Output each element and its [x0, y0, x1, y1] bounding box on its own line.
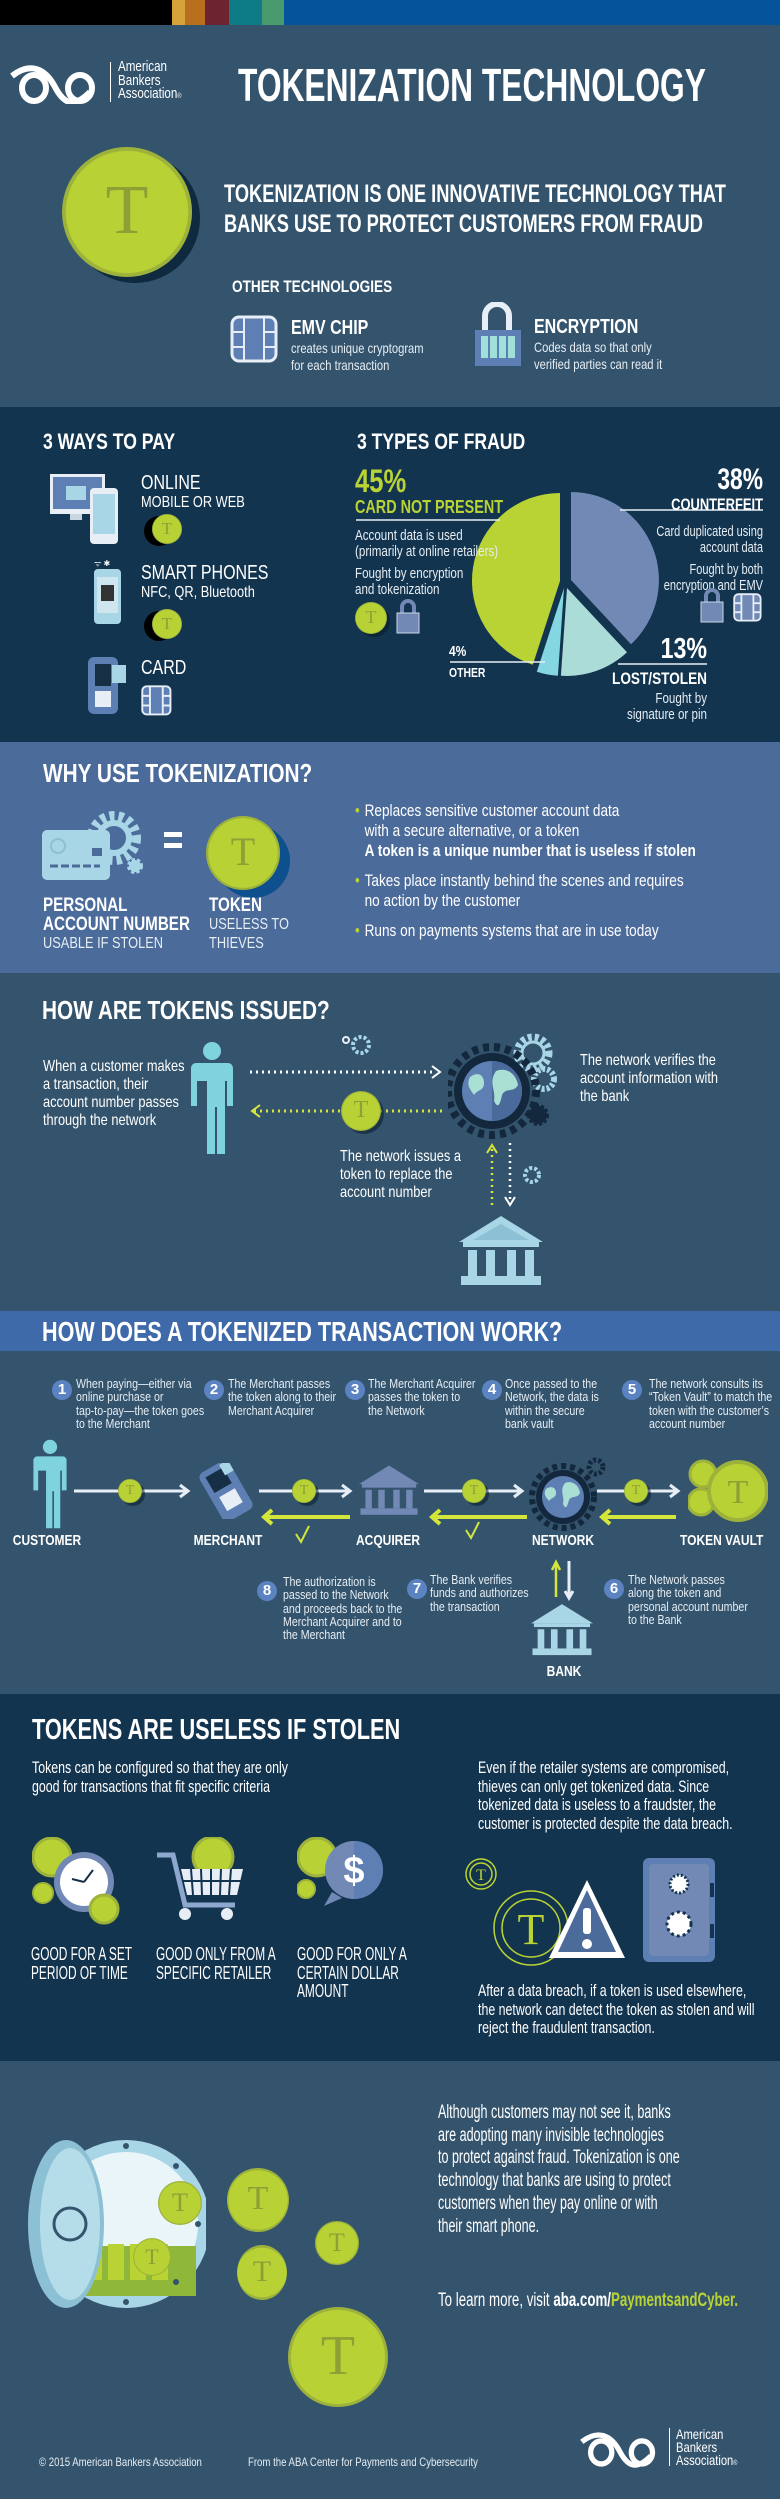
closing text	[438, 2102, 680, 2238]
panel: transaction flow: T	[300, 1483, 308, 1498]
callout: counterfeit: encryption and EMV	[664, 578, 763, 594]
panel: transaction flow	[0, 1351, 780, 1694]
step 1: to the Merchant	[76, 1416, 150, 1431]
pie chart	[356, 492, 763, 676]
online text: ONLINE	[141, 472, 201, 494]
step 5: “Token Vault” to match the	[649, 1389, 772, 1404]
icon: token vault coins	[688, 1460, 768, 1522]
label: dollar: AMOUNT	[297, 1981, 348, 2001]
smart phones text: SMART PHONES	[141, 562, 268, 584]
closing text: customers when they pay online or with	[438, 2193, 658, 2214]
arrow: account number to network	[250, 1035, 442, 1079]
text: customer: through the network	[43, 1112, 156, 1129]
label: time: GOOD FOR A SET	[31, 1944, 132, 1964]
other technologies heading: OTHER TECHNOLOGIES	[232, 277, 392, 296]
icon: dollar bubble: $	[343, 1850, 365, 1892]
EMV chip	[230, 316, 424, 373]
step 8: passed to the Network	[283, 1587, 389, 1602]
icon: network globe with gears	[448, 1034, 557, 1139]
step 1	[52, 1376, 204, 1431]
callout: counterfeit: 38%	[717, 463, 763, 496]
callout: card not present: CARD NOT PRESENT	[355, 497, 503, 517]
callout: card not present: 45%	[355, 463, 406, 499]
step 3: 3	[351, 1381, 359, 1398]
callout: other: 4%	[449, 643, 466, 660]
panel: closing: T	[253, 2255, 271, 2288]
footer copyright: © 2015 American Bankers Association	[39, 2455, 202, 2469]
icon: lock	[475, 302, 521, 366]
EMV chip: EMV CHIP	[291, 317, 368, 339]
bullet list: A token is a unique number that is useless if stolen	[365, 841, 696, 860]
callout: card not present: Account data is used	[355, 528, 463, 544]
arrow: token back to customer	[250, 1104, 442, 1118]
text: network verifies	[580, 1052, 718, 1105]
heading: HOW ARE TOKENS ISSUED?	[42, 995, 330, 1025]
coin: issued token: T	[354, 1097, 368, 1123]
encryption: Codes data so that only	[534, 339, 652, 355]
icon: acquirer bank	[359, 1466, 419, 1515]
panel: ways to pay and fraud types: MOBILE OR WEB	[141, 494, 245, 511]
callout: lost/stolen: 13%	[661, 633, 707, 665]
step 2: 2	[210, 1381, 218, 1398]
icon: bank	[531, 1602, 593, 1658]
icon: smartphone: ᯤ ✱	[94, 559, 111, 568]
text: retailer compromised: customer is protected despite the data breach.	[478, 1815, 733, 1833]
panel: transaction flow: T	[632, 1483, 640, 1498]
step 5	[622, 1376, 772, 1431]
text: network issues token	[340, 1148, 461, 1201]
coins floating: T	[172, 2188, 188, 2217]
text: configuration: good for transactions that fit specific criteria	[32, 1778, 270, 1796]
callout: lost/stolen: Fought by	[655, 691, 707, 707]
bullet list: Runs on payments systems that are in use today	[365, 921, 659, 940]
icon: smartphone	[94, 559, 121, 624]
card text: CARD	[141, 657, 186, 679]
label: dollar: GOOD FOR ONLY A	[297, 1944, 407, 1964]
text: retailer compromised: tokenized data is useless to a fraudster, the	[478, 1796, 716, 1814]
title: TOKENIZATION TECHNOLOGY	[238, 59, 706, 111]
panel: transaction flow: T	[470, 1483, 478, 1498]
coin online	[152, 514, 182, 544]
callout: other	[449, 643, 486, 680]
icon: breach illustration: T	[476, 1867, 486, 1884]
label: token	[209, 895, 289, 952]
icon: breach illustration	[465, 1858, 725, 1966]
bullet list: •	[355, 801, 360, 820]
callout: lost/stolen: signature or pin	[627, 707, 707, 723]
headline	[224, 180, 726, 238]
step 6: 6	[610, 1580, 618, 1597]
step 3	[345, 1376, 476, 1418]
footer source: From the ABA Center for Payments and Cybersecurity	[248, 2455, 478, 2469]
logo: Association®	[118, 86, 181, 102]
encryption: verified parties can read it	[534, 356, 662, 372]
logo: Bankers	[118, 72, 161, 88]
headline: BANKS USE TO PROTECT CUSTOMERS FROM FRAUD	[224, 210, 703, 238]
icon: chip	[230, 316, 278, 362]
text: customer: account number passes	[43, 1094, 179, 1111]
header band: how does a tokenized transaction work	[0, 1311, 780, 1351]
step 6: The Network passes	[628, 1572, 725, 1587]
header panel	[0, 25, 780, 407]
heading: TOKENS ARE USELESS IF STOLEN	[32, 1714, 400, 1746]
closing text: are adopting many invisible technologies	[438, 2125, 664, 2146]
icon: token vault coins: T	[728, 1474, 749, 1511]
text: network issues token: account number	[340, 1184, 432, 1201]
text: network verifies: the bank	[580, 1088, 629, 1105]
closing text: Although customers may not see it, banks	[438, 2102, 671, 2123]
step 3: The Merchant Acquirer	[368, 1376, 475, 1391]
callout: other: OTHER	[449, 665, 485, 680]
step 7: funds and authorizes	[430, 1585, 529, 1600]
icon: bank	[459, 1216, 543, 1285]
coin: issued token	[341, 1091, 381, 1131]
panel: transaction flow: ACQUIRER	[356, 1532, 420, 1549]
learn more link text: To learn more, visit aba.com/PaymentsandCyber.	[438, 2290, 738, 2311]
encryption	[475, 302, 662, 372]
text: after breach: After a data breach, if a token is used elsewhere,	[478, 1982, 746, 2000]
text: retailer compromised	[478, 1759, 733, 1833]
icons: lock and chip	[700, 588, 762, 622]
bullet list: with a secure alternative, or a token	[365, 821, 579, 840]
text: after breach: the network can detect the token as stolen and will	[478, 2001, 755, 2019]
step 8: and proceeds back to the	[283, 1601, 402, 1616]
label: personal account number: PERSONAL	[43, 895, 127, 916]
footer logo: American	[676, 2426, 723, 2442]
coins on arrows	[118, 1479, 142, 1503]
panel: ways to pay and fraud types	[0, 407, 780, 742]
step 2: Merchant Acquirer	[228, 1403, 314, 1418]
step 6: along the token and	[628, 1585, 721, 1600]
icon: customer	[33, 1440, 67, 1528]
text: retailer compromised: thieves can only get tokenized data. Since	[478, 1778, 709, 1796]
step 8: the Merchant	[283, 1627, 345, 1642]
icons: token and lock: T	[366, 607, 376, 627]
icon: chip small	[141, 685, 172, 716]
icon: dollar bubble	[297, 1837, 387, 1909]
step 4	[482, 1376, 599, 1431]
callout: counterfeit: Fought by both	[689, 562, 763, 578]
step 3: passes the token to	[368, 1389, 460, 1404]
token coin	[206, 816, 280, 890]
label: retailer: SPECIFIC RETAILER	[156, 1963, 271, 1983]
callout: card not present: (primarily at online retailers)	[355, 544, 498, 560]
coin online: T	[162, 519, 172, 538]
EMV chip: creates unique cryptogram	[291, 340, 424, 356]
step 2: The Merchant passes	[228, 1376, 330, 1391]
logo	[10, 59, 182, 104]
step 4: Once passed to the	[505, 1376, 597, 1391]
label: token: TOKEN	[209, 895, 262, 916]
panel: closing: T	[248, 2180, 268, 2217]
panel: how are tokens issued	[0, 973, 780, 1311]
step 8	[257, 1579, 397, 1645]
closing text: to protect against fraud. Tokenization is one	[438, 2147, 680, 2168]
callout: card not present: and tokenization	[355, 582, 439, 598]
step 2	[204, 1376, 336, 1418]
text: network issues token: The network issues a	[340, 1148, 461, 1165]
step 4: 4	[488, 1381, 496, 1398]
heading: 3 types of fraud: 3 TYPES OF FRAUD	[357, 429, 525, 454]
bullet list: •	[355, 921, 360, 940]
panel: transaction flow: NETWORK	[532, 1532, 594, 1549]
step 7: 7	[413, 1580, 421, 1597]
bullet list: Replaces sensitive customer account data	[365, 801, 619, 820]
arrows: flow	[0, 1351, 780, 1611]
panel: closing	[0, 2061, 780, 2499]
panel: closing: T	[145, 2244, 159, 2269]
text: customer: When a customer makes	[43, 1058, 185, 1075]
label: retailer: GOOD ONLY FROM A	[156, 1944, 276, 1964]
EMV chip: for each transaction	[291, 357, 389, 373]
label: dollar: CERTAIN DOLLAR	[297, 1963, 399, 1983]
bullet list: Takes place instantly behind the scenes and requires	[365, 871, 684, 890]
text: network verifies: account information with	[580, 1070, 718, 1087]
text: configuration	[32, 1759, 288, 1797]
step 5: The network consults its	[649, 1376, 763, 1391]
label: personal account number	[43, 895, 190, 952]
panel: closing: T	[321, 2325, 355, 2387]
step 5: token with the customer’s	[649, 1403, 769, 1418]
label: time: PERIOD OF TIME	[31, 1963, 128, 1983]
text: network issues token: token to replace the	[340, 1166, 452, 1183]
label: token: THIEVES	[209, 935, 264, 952]
step 1: tap-to-pay—the token goes	[76, 1403, 204, 1418]
step 7	[407, 1579, 517, 1619]
step 4: bank vault	[505, 1416, 553, 1431]
icon: person	[191, 1042, 233, 1154]
equals sign	[164, 832, 182, 848]
big token coin: T	[106, 172, 148, 249]
coins on arrows: T	[126, 1483, 134, 1498]
icon: network globe	[529, 1458, 606, 1531]
text: configuration: Tokens can be configured so that they are only	[32, 1759, 288, 1777]
bullet list: •	[355, 871, 360, 890]
label: personal account number: USABLE IF STOLEN	[43, 935, 163, 952]
text: customer	[43, 1058, 185, 1129]
label: bank: BANK	[547, 1663, 581, 1680]
panel: why use tokenization	[0, 742, 780, 973]
top colour bar	[0, 0, 780, 25]
bullet list	[355, 801, 696, 940]
step 7: the transaction	[430, 1599, 500, 1614]
label: time	[31, 1945, 132, 1982]
footer logo: Bankers	[676, 2439, 717, 2455]
icon: breach illustration: T	[518, 1905, 545, 1954]
panel: transaction flow: MERCHANT	[194, 1532, 262, 1549]
step 6: personal account number	[628, 1599, 748, 1614]
step 7: The Bank verifies	[430, 1572, 512, 1587]
icon: vault with coins	[26, 2136, 206, 2312]
logo: American	[118, 59, 167, 75]
panel: ways to pay and fraud types: NFC, QR, Bluetooth	[141, 584, 255, 601]
step 8: The authorization is	[283, 1574, 376, 1589]
big token coin	[62, 147, 192, 277]
icon: card terminal	[88, 657, 126, 714]
icon: computer and phone	[50, 474, 118, 544]
callout: counterfeit: account data	[700, 540, 763, 556]
text: network verifies: The network verifies the	[580, 1052, 716, 1069]
icon: cart with coin	[155, 1837, 247, 1923]
heading: 3 ways to pay: 3 WAYS TO PAY	[43, 429, 175, 454]
icons: token and lock	[355, 599, 420, 637]
step 6: to the Bank	[628, 1612, 682, 1627]
step 6	[604, 1579, 754, 1629]
coins floating	[158, 2181, 202, 2225]
icon: card with gears	[42, 811, 143, 880]
token coin: T	[231, 829, 255, 874]
step 4: Network, the data is	[505, 1389, 599, 1404]
panel: closing: T	[329, 2228, 345, 2257]
step 3: the Network	[368, 1403, 425, 1418]
callout: counterfeit: Card duplicated using	[656, 524, 763, 540]
step 1: When paying—either via	[76, 1376, 192, 1391]
footer logo: Association®	[676, 2452, 737, 2468]
header band: how does a tokenized transaction work: HOW DOES A TOKENIZED TRANSACTION WORK?	[42, 1316, 562, 1347]
arrows: network and bank	[486, 1143, 541, 1207]
text: after breach	[478, 1982, 755, 2038]
callout: card not present: Fought by encryption	[355, 566, 463, 582]
step 8: Merchant Acquirer and to	[283, 1614, 402, 1629]
step 5: 5	[628, 1381, 636, 1398]
text: retailer compromised: Even if the retailer systems are compromised,	[478, 1759, 729, 1777]
label: retailer	[156, 1945, 276, 1982]
step 1: online purchase or	[76, 1389, 163, 1404]
coin phones	[152, 609, 182, 639]
step 1: 1	[58, 1381, 66, 1398]
callout: lost/stolen	[612, 633, 707, 723]
label: personal account number: ACCOUNT NUMBER	[43, 914, 190, 935]
callout: counterfeit	[656, 463, 763, 594]
closing text: technology that banks are using to protect	[438, 2170, 671, 2191]
panel: tokens are useless if stolen	[0, 1694, 780, 2061]
heading: WHY USE TOKENIZATION?	[43, 758, 312, 788]
icon: clock with coins	[32, 1837, 122, 1925]
callout: lost/stolen: LOST/STOLEN	[612, 669, 707, 688]
bullet list: no action by the customer	[365, 891, 520, 910]
step 4: within the secure	[505, 1403, 585, 1418]
headline: TOKENIZATION IS ONE INNOVATIVE TECHNOLOGY THAT	[224, 180, 726, 208]
step 5: account number	[649, 1416, 725, 1431]
closing text: their smart phone.	[438, 2216, 539, 2237]
footer logo	[580, 2428, 755, 2468]
icon: merchant terminal	[200, 1463, 252, 1519]
label: token: USELESS TO	[209, 916, 289, 933]
step 2: the token along to their	[228, 1389, 336, 1404]
text: customer: a transaction, their	[43, 1076, 148, 1093]
text: after breach: reject the fraudulent transaction.	[478, 2019, 655, 2037]
panel: transaction flow: TOKEN VAULT	[680, 1532, 763, 1549]
callout: card not present	[355, 463, 503, 598]
coin phones: T	[162, 614, 172, 633]
callout: counterfeit: COUNTERFEIT	[671, 495, 763, 514]
encryption: ENCRYPTION	[534, 316, 638, 338]
label: dollar	[297, 1945, 407, 2001]
labels: CUSTOMER	[13, 1532, 81, 1549]
step 8: 8	[263, 1582, 271, 1599]
